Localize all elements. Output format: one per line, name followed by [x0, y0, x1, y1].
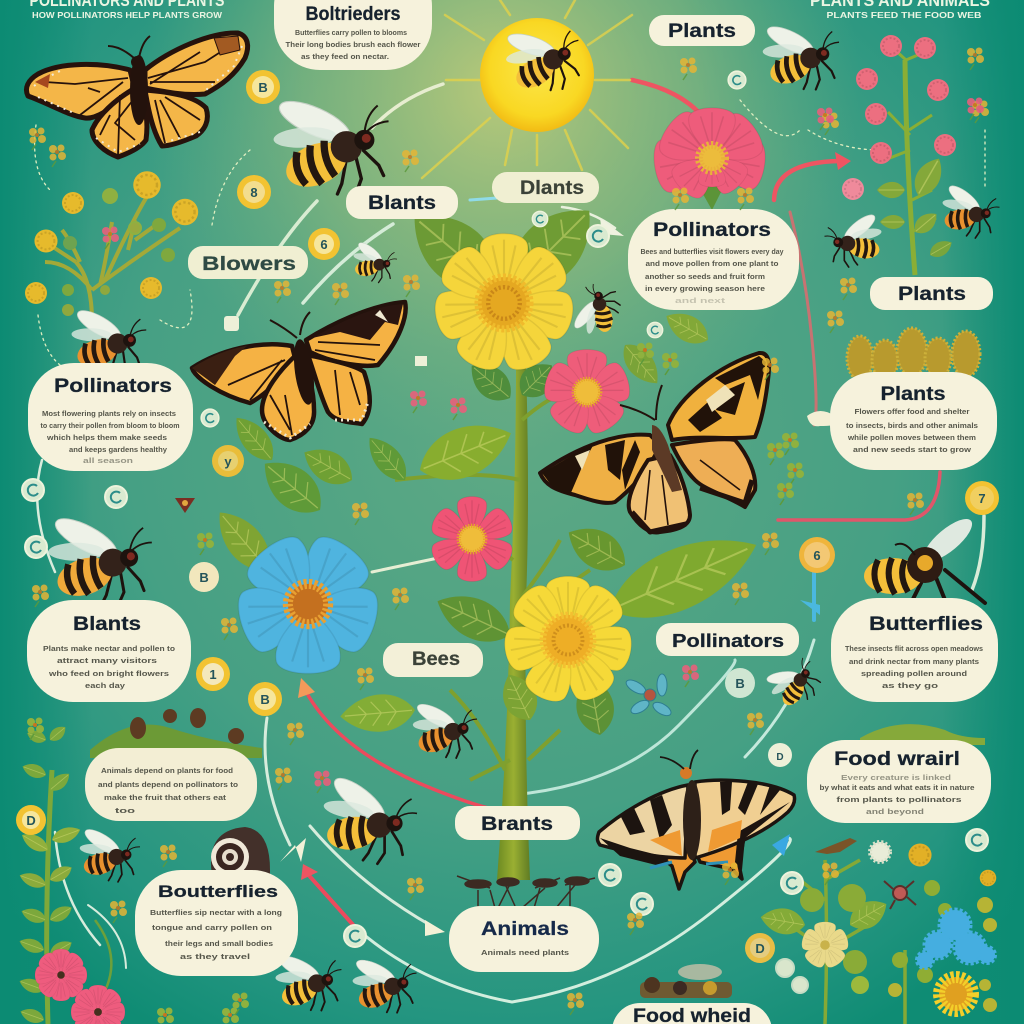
panel: untitled text panel: Animals depend on plants for food — [101, 766, 233, 775]
butterfly: lower right swallowtail — [597, 750, 795, 889]
arrow: cream line by bee — [972, 516, 984, 590]
panel: Plants right: and new seeds start to grow — [853, 445, 971, 454]
insect: red bug — [884, 881, 916, 909]
panel: Blants left: who feed on bright flowers — [48, 669, 169, 678]
arrow: bend near left vine — [88, 905, 126, 968]
label: Brants: Brants — [481, 814, 553, 835]
blue flower cluster — [917, 910, 995, 968]
panel: Pollinators right: Pollinators — [653, 220, 771, 241]
label: Blants — [346, 186, 458, 219]
badge: 7 — [965, 481, 999, 515]
insect: red moth near left — [175, 498, 195, 513]
badge: D bottom — [745, 933, 775, 963]
panel: Blants left: each day — [85, 681, 126, 690]
panel: Food web right: from plants to pollinators — [836, 795, 962, 804]
insects above food web panel — [640, 964, 732, 998]
panel: Pollinators right: and move pollen from one plant to — [646, 259, 779, 268]
insect: small beetle right — [759, 646, 829, 716]
plant: top right with pink flowers — [842, 35, 956, 275]
insect: brown moth — [815, 838, 857, 854]
arrow: white to star — [265, 718, 290, 845]
label: Plants right — [870, 277, 993, 310]
label: Bees — [383, 643, 483, 677]
panel: Boutderriers — [135, 870, 298, 976]
panel: Butterflies right: spreading pollen around — [861, 669, 967, 678]
panel: Animals — [449, 906, 599, 972]
panel: Boutderriers: Boutterflies — [158, 882, 278, 901]
bee: small hoverer — [571, 284, 620, 334]
arrowheads — [224, 152, 851, 936]
sun rays — [422, 0, 632, 178]
badge: 8 — [237, 175, 271, 209]
label: Blowers: Blowers — [202, 254, 296, 275]
garden ground: shrubs above text panel — [90, 708, 262, 758]
panel: Boltrieders — [274, 0, 432, 70]
panel: Blants left: Blants — [73, 614, 141, 635]
arrow: blue dash — [470, 197, 510, 200]
label: Brants — [455, 806, 580, 840]
panel: Boltrieders: as they feed on nectar. — [301, 52, 389, 61]
panel: Pollinators right: and next — [675, 296, 726, 305]
panel: Butterflies right: and drink nectar from many plants — [849, 657, 979, 666]
badge: B lower — [248, 682, 282, 716]
badge: 6 right — [799, 537, 835, 573]
title: top left — [30, 0, 224, 20]
panel: Food web right: Every creature is linked — [841, 773, 952, 782]
label: Plants top: Plants — [668, 21, 736, 42]
flower: yellow lower — [501, 576, 635, 707]
panel: Pollinators left: to carry their pollen from bloom to bloom — [40, 421, 180, 430]
insect: snail shape — [211, 827, 270, 876]
bee: centre low — [322, 772, 417, 864]
butterfly: top left monarch — [26, 33, 248, 157]
title: top right: PLANTS FEED THE FOOD WEB — [826, 10, 982, 20]
title: top left: HOW POLLINATORS HELP PLANTS GROW — [32, 10, 223, 20]
bee: bottom one — [269, 941, 349, 1019]
panel: Boltrieders: Butterflies carry pollen to blooms — [295, 28, 407, 37]
badge: y: y — [224, 454, 232, 469]
panel: Plants right: to insects, birds and other animals — [846, 421, 978, 430]
panel: Pollinators left: Most flowering plants rely on insects — [42, 409, 176, 418]
label: Blowers — [188, 246, 308, 279]
panel: Food web right: and beyond — [866, 807, 925, 816]
badge: 1 — [196, 657, 230, 691]
flower: pink small — [428, 497, 516, 581]
arrow: red bottom segment — [305, 871, 355, 927]
panel: Blants left: Plants make nectar and pollen to — [43, 644, 175, 653]
panel: Pollinators left: which helps them make seeds — [46, 433, 167, 442]
arrow: white to animals — [310, 826, 430, 925]
label: Dlants — [492, 172, 599, 203]
panel: Plants right: while pollen moves between them — [847, 433, 976, 442]
panel: Pollinators left: Pollinators — [54, 376, 172, 397]
arrow: blue connector — [812, 568, 816, 620]
ground: above food panel — [860, 724, 985, 745]
panel: Pollinators right — [628, 209, 799, 310]
panel: Blants left — [27, 600, 191, 702]
panel: Food web right — [807, 740, 991, 823]
bee: by leaf — [408, 691, 483, 765]
panel: Animals: Animals — [481, 919, 569, 940]
bee: butterflies panel — [864, 512, 985, 605]
badge: D left — [16, 805, 46, 835]
arrow: red line below plants panel — [778, 472, 940, 520]
arrow: left loop — [37, 460, 55, 572]
arrow: teal curve to pollinators — [512, 660, 735, 795]
panel: Plants right — [830, 372, 997, 470]
panel: Plants right: Plants — [880, 384, 946, 405]
panel: Pollinators right: in every growing season here — [645, 284, 765, 293]
badge: cream B — [725, 668, 755, 698]
badge: B top — [246, 70, 280, 104]
panel: Butterflies right — [831, 598, 998, 702]
badge: y — [212, 445, 244, 477]
arrow: sun to pink flower — [632, 80, 702, 116]
panel: Pollinators right: Bees and butterflies visit flowers every day — [640, 247, 784, 256]
badge: cream D — [768, 743, 792, 767]
label: Plants top — [649, 15, 755, 46]
panel: Pollinators left — [28, 363, 193, 471]
insects above animals panel — [457, 876, 595, 908]
panel: Food web bottom — [612, 1003, 772, 1024]
badge: B lower: B — [260, 692, 270, 707]
badge: D bottom: D — [755, 941, 765, 956]
panel: Boutderriers: Butterflies sip nectar with a long — [150, 908, 282, 917]
badge: cream D: D — [776, 752, 784, 763]
leaves behind top flower — [396, 190, 610, 307]
bee: left with orange wings — [40, 497, 162, 616]
bee: top large — [262, 71, 404, 211]
plant: bottom right garden — [758, 842, 997, 1024]
badge: 6: 6 — [320, 237, 328, 252]
flower: pink right — [541, 350, 633, 438]
arrow: left vine curve — [55, 832, 100, 945]
bee: middle right — [824, 211, 882, 267]
central stem — [395, 366, 590, 880]
badge: B top: B — [258, 80, 268, 95]
bee on sun — [496, 9, 592, 104]
panel: Pollinators right: another so seeds and fruit form — [645, 272, 765, 281]
leaves on central plant — [206, 305, 768, 738]
arrow: dotted trail top left — [35, 100, 985, 365]
arrow: big red curve — [303, 686, 510, 810]
flower: large yellow top — [431, 234, 577, 376]
badge: D left: D — [26, 813, 36, 828]
panel: Animals: Animals need plants — [481, 948, 569, 957]
arrow: flower link — [372, 558, 438, 572]
panel: untitled text panel: make the fruit that others eat — [104, 793, 227, 802]
bee: lower left — [77, 820, 143, 886]
label: Pollinators lower: Pollinators — [672, 631, 784, 651]
badge: 1: 1 — [209, 667, 217, 682]
panel: Plants right: Flowers offer food and shelter — [854, 407, 970, 416]
arrow: red line down the right — [790, 212, 816, 425]
plant: bottom left vine — [17, 723, 125, 1024]
panel: Blants left: attract many visitors — [57, 656, 157, 665]
arrow: long bottom curve — [355, 838, 790, 1002]
badge: 6 — [308, 228, 340, 260]
label: Blants: Blants — [368, 193, 436, 214]
panel: untitled text panel: too — [115, 806, 136, 815]
panel: Pollinators left: and keeps gardens healthy — [69, 445, 168, 454]
panel: untitled text panel — [85, 748, 257, 821]
flower: pink side view — [650, 106, 769, 210]
badge: B cream: B — [199, 570, 209, 585]
arrow: up to top right plant — [774, 161, 840, 200]
panel: Butterflies right: as they go — [882, 681, 939, 690]
plant: top left with yellow flowers — [25, 171, 198, 322]
flower: blue — [232, 529, 384, 673]
arrow: sun to bee — [372, 84, 443, 128]
butterfly: centre left — [192, 302, 406, 440]
bee: small top centre — [353, 240, 397, 283]
panel: Boltrieders: Their long bodies brush each flower — [286, 40, 421, 49]
label: Dlants: Dlants — [520, 178, 584, 199]
panel: Butterflies right: Butterflies — [869, 614, 983, 635]
bee: bottom two — [347, 945, 424, 1021]
badge: B cream — [189, 562, 219, 592]
arrow: white arc to blowers label — [238, 201, 317, 315]
insect: blue fly — [624, 674, 673, 718]
garden ground: trees above plants panel — [847, 328, 980, 380]
panel: Food web right: by what it eats and what eats it in nature — [820, 783, 974, 792]
panel: Boutderriers: their legs and small bodies — [165, 939, 273, 948]
panel: Boltrieders: Boltrieders — [306, 4, 400, 25]
badge: cream B: B — [735, 676, 745, 691]
bee: right side near plant — [942, 182, 1000, 238]
arrow: white arc from blants — [303, 224, 393, 303]
butterfly: centre right — [540, 353, 769, 533]
panel: untitled text panel: and plants depend on pollinators to — [98, 780, 238, 789]
label: Bees: Bees — [412, 649, 460, 670]
panel: Boutderriers: tongue and carry pollen on — [152, 923, 273, 932]
bee: top right — [756, 9, 848, 99]
panel: Butterflies right: These insects flit across open meadows — [845, 644, 983, 653]
panel: Food web right: Food wrairl — [834, 749, 960, 770]
badge: 6 right: 6 — [813, 548, 821, 563]
panel: Pollinators left: all season — [83, 456, 134, 465]
sun — [422, 0, 632, 178]
title: top right — [810, 0, 990, 20]
label: Pollinators lower — [656, 623, 799, 656]
arrow: teal curve to butterflies — [745, 640, 814, 757]
small green sprig scatter — [27, 342, 804, 1024]
label: Plants right: Plants — [898, 284, 966, 305]
panel: Boutderriers: as they travel — [180, 952, 250, 961]
bee: on pollinators panel — [67, 297, 152, 380]
small pink flower scatter — [102, 98, 984, 793]
badge: 7: 7 — [978, 491, 986, 506]
badge: 8: 8 — [250, 185, 258, 200]
arrow: blants to pollinators — [562, 207, 615, 228]
